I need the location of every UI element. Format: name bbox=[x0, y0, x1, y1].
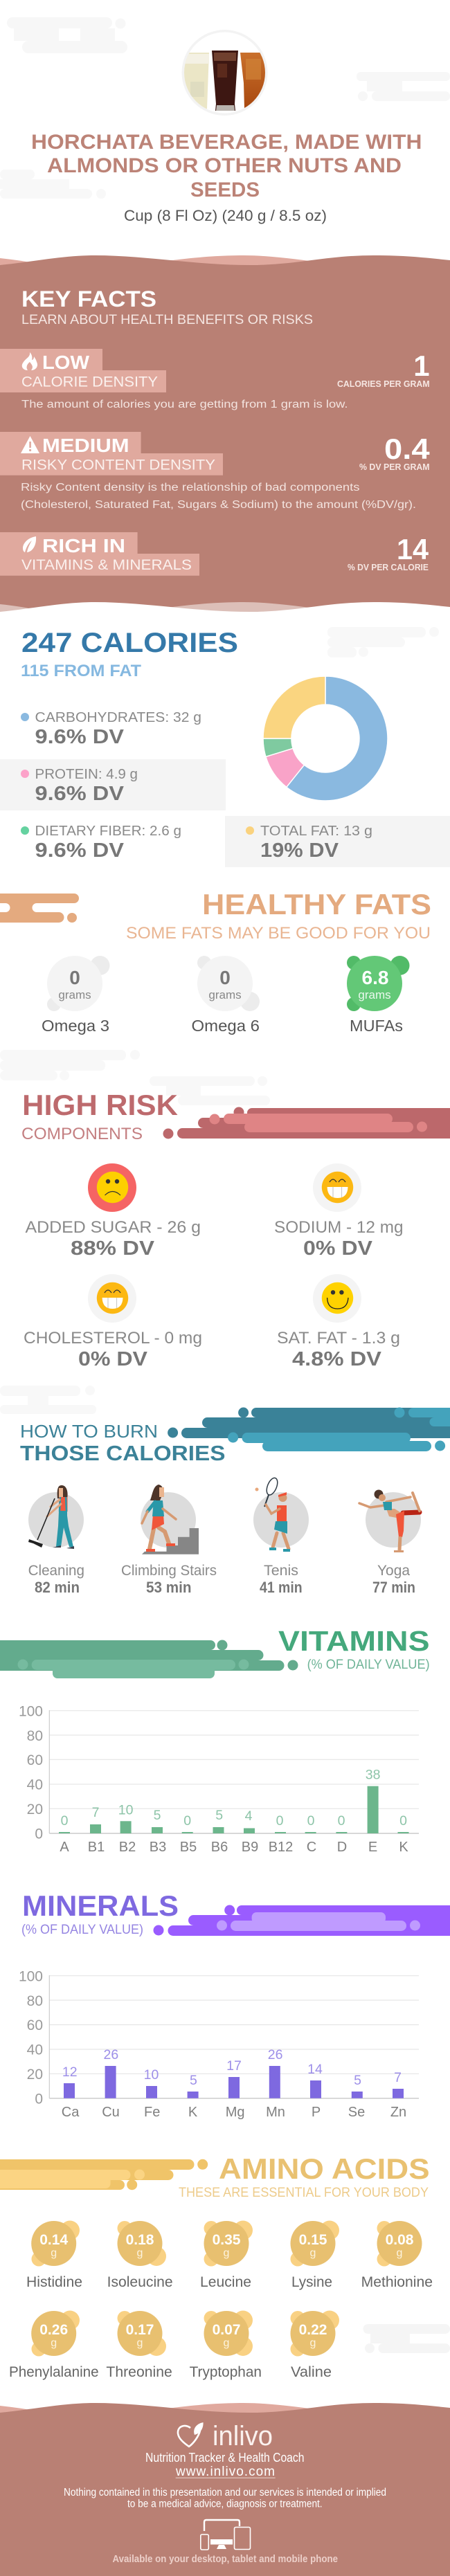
amino: methionine: Methionine bbox=[361, 2274, 433, 2290]
subheading: from fat: 115 FROM FAT bbox=[21, 662, 141, 680]
bar chart: minerals: Cu bbox=[102, 2105, 120, 2120]
decorative cloud: above high risk left bbox=[0, 1050, 140, 1080]
title: HORCHATA BEVERAGE, MADE WITH bbox=[31, 131, 422, 154]
calorie density block: LOW bbox=[42, 352, 90, 373]
subheading: THESE ARE ESSENTIAL FOR YOUR BODY bbox=[179, 2186, 429, 2200]
disclaimer: Nothing contained in this presentation and our services is intended or implied bbox=[64, 2487, 386, 2498]
activity: climbing stairs: Climbing Stairs bbox=[121, 1563, 217, 1579]
bar chart: minerals: 20 bbox=[27, 2067, 43, 2083]
title: SEEDS bbox=[190, 179, 260, 201]
bar chart: vitamins: 4 bbox=[245, 1808, 253, 1824]
activity: tennis: Tenis bbox=[264, 1563, 298, 1579]
bar chart: vitamins: B3 bbox=[150, 1840, 166, 1855]
vitamins and minerals richness block: VITAMINS & MINERALS bbox=[21, 556, 192, 573]
bar chart: vitamins: 5 bbox=[154, 1808, 161, 1823]
bar chart: vitamins: 0 bbox=[276, 1813, 284, 1829]
bar chart: minerals: 0 bbox=[35, 2092, 43, 2107]
bar chart: minerals bbox=[19, 1968, 419, 2120]
risky content density block: (Cholesterol, Saturated Fat, Sugars & Sodium) to the amount (%DV/gr). bbox=[21, 499, 416, 511]
heading: how to burn: HOW TO BURN bbox=[20, 1421, 158, 1442]
bar chart: minerals: Ca bbox=[62, 2105, 80, 2120]
amino: threonine: 0.17 bbox=[126, 2322, 154, 2338]
website link: www.inlivo.com bbox=[175, 2465, 275, 2479]
risky content density block: MEDIUM bbox=[42, 435, 129, 456]
icon: warning triangle bbox=[21, 436, 39, 453]
icon: devices bbox=[201, 2520, 251, 2550]
bar chart: vitamins: 60 bbox=[27, 1752, 43, 1768]
activity: cleaning bbox=[28, 1485, 84, 1596]
subheading: SOME FATS MAY BE GOOD FOR YOU bbox=[126, 924, 431, 943]
macro: total fat: 19% DV bbox=[260, 840, 339, 862]
bar chart: vitamins bbox=[19, 1703, 419, 1855]
amino: phenylalanine: Phenylalanine bbox=[9, 2364, 99, 2380]
amino: tryptophan bbox=[190, 2310, 262, 2380]
risky content density block: RISKY CONTENT DENSITY bbox=[21, 457, 215, 473]
bar chart: vitamins: 38 bbox=[366, 1768, 380, 1783]
bar chart: vitamins: B6 bbox=[211, 1840, 228, 1855]
panel: footer bbox=[0, 2403, 450, 2576]
bar chart: minerals: 26 bbox=[104, 2047, 118, 2062]
bar chart: minerals: 14 bbox=[307, 2062, 323, 2077]
heading: those calories: THOSE CALORIES bbox=[20, 1441, 226, 1465]
macro: total fat bbox=[225, 816, 450, 867]
amino: histidine bbox=[26, 2220, 82, 2290]
heading: healthy fats: HEALTHY FATS bbox=[202, 888, 431, 920]
heading: calories: 247 CALORIES bbox=[21, 628, 238, 658]
amino: valine: g bbox=[310, 2337, 316, 2349]
amino: leucine: Leucine bbox=[200, 2274, 251, 2290]
availability note: Available on your desktop, tablet and mobile phone bbox=[112, 2553, 338, 2565]
risk item: cholesterol bbox=[24, 1274, 202, 1370]
calorie density block: CALORIES PER GRAM bbox=[337, 379, 430, 389]
food photo: three glasses in a circle bbox=[180, 30, 270, 116]
amino: lysine: Lysine bbox=[291, 2274, 332, 2290]
bar chart: vitamins: 0 bbox=[399, 1813, 407, 1829]
badge: omega 6: 0 bbox=[219, 967, 231, 988]
vitamins and minerals richness block: % DV PER CALORIE bbox=[348, 563, 429, 572]
badge: omega 3: 0 bbox=[69, 967, 80, 988]
bar chart: vitamins: 0 bbox=[338, 1813, 345, 1829]
bar chart: vitamins: E bbox=[368, 1840, 377, 1855]
amino: phenylalanine: 0.26 bbox=[39, 2322, 68, 2338]
badge: omega 6: grams bbox=[208, 988, 242, 1001]
amino: leucine: 0.35 bbox=[213, 2232, 241, 2248]
amino: valine: Valine bbox=[291, 2364, 332, 2380]
amino: isoleucine: Isoleucine bbox=[107, 2274, 173, 2290]
amino: isoleucine: g bbox=[137, 2247, 143, 2259]
badge: MUFAs: grams bbox=[358, 988, 391, 1001]
calorie density block: The amount of calories you are getting from 1 gram is low. bbox=[21, 399, 348, 410]
panel: calories and macronutrients bbox=[0, 628, 450, 867]
amino: valine bbox=[291, 2310, 339, 2380]
bar chart: vitamins: D bbox=[337, 1840, 347, 1855]
bar chart: vitamins: 0 bbox=[35, 1826, 43, 1842]
badge: omega 3: grams bbox=[58, 988, 91, 1001]
bar chart: minerals: 5 bbox=[354, 2073, 361, 2088]
bar chart: vitamins: A bbox=[60, 1840, 69, 1855]
heading: key facts: KEY FACTS bbox=[21, 287, 156, 311]
activity: climbing stairs: 53 min bbox=[146, 1579, 191, 1596]
banner: minerals bbox=[154, 1905, 450, 1936]
bar chart: vitamins: B12 bbox=[269, 1840, 293, 1855]
bar chart: minerals: P bbox=[312, 2105, 321, 2120]
disclaimer bbox=[64, 2487, 386, 2510]
risky content density block bbox=[0, 432, 430, 511]
bar chart: minerals: 80 bbox=[27, 1993, 43, 2009]
badge: MUFAs bbox=[347, 956, 410, 1035]
icon: leaf bbox=[23, 536, 36, 552]
risk item: saturated fat bbox=[277, 1274, 400, 1370]
calorie density block bbox=[0, 349, 430, 410]
macro: carbohydrates bbox=[21, 710, 201, 748]
panel: how to burn those calories bbox=[20, 1408, 450, 1596]
amino: threonine: g bbox=[137, 2337, 143, 2349]
bar chart: vitamins: C bbox=[307, 1840, 316, 1855]
risk item: cholesterol: CHOLESTEROL - 0 mg bbox=[24, 1329, 202, 1348]
risk item: cholesterol: 0% DV bbox=[78, 1348, 148, 1370]
macro: dietary fiber: DIETARY FIBER: 2.6 g bbox=[35, 824, 181, 839]
macro: protein: PROTEIN: 4.9 g bbox=[35, 767, 138, 782]
heading: high risk: HIGH RISK bbox=[22, 1089, 178, 1121]
amino: isoleucine: 0.18 bbox=[126, 2232, 154, 2248]
risk item: sodium: 0% DV bbox=[303, 1237, 373, 1260]
bar chart: vitamins: 80 bbox=[27, 1728, 43, 1744]
macro: total fat: TOTAL FAT: 13 g bbox=[260, 824, 372, 839]
badge: omega 3 bbox=[42, 956, 109, 1035]
calorie density block: 1 bbox=[413, 350, 430, 382]
bar chart: minerals: 40 bbox=[27, 2042, 43, 2058]
macro: protein: 9.6% DV bbox=[35, 783, 125, 805]
amino: isoleucine bbox=[107, 2221, 173, 2290]
heading: vitamins: VITAMINS bbox=[278, 1625, 430, 1657]
amino: methionine: 0.08 bbox=[386, 2232, 414, 2248]
badge: MUFAs: 6.8 bbox=[362, 967, 388, 988]
bar chart: vitamins: 5 bbox=[215, 1808, 223, 1823]
bar chart: minerals: 17 bbox=[226, 2058, 242, 2074]
risky content density block: % DV PER GRAM bbox=[359, 462, 430, 472]
macro: carbohydrates: CARBOHYDRATES: 32 g bbox=[35, 710, 201, 725]
title: ALMONDS OR OTHER NUTS AND bbox=[47, 154, 402, 177]
subheading: LEARN ABOUT HEALTH BENEFITS OR RISKS bbox=[21, 313, 313, 327]
macro: dietary fiber bbox=[21, 824, 181, 862]
bar chart: minerals: 60 bbox=[27, 2017, 43, 2033]
bar chart: vitamins: 10 bbox=[118, 1803, 134, 1818]
logo: inlivo bbox=[178, 2421, 273, 2451]
bar chart: minerals: K bbox=[188, 2105, 198, 2120]
bar chart: minerals: Fe bbox=[144, 2105, 160, 2120]
badge: omega 6 bbox=[191, 956, 260, 1035]
decorative cloud: above burn section bbox=[0, 1386, 96, 1414]
panel: amino acids bbox=[0, 2152, 433, 2380]
bar chart: vitamins: 100 bbox=[19, 1703, 43, 1719]
amino: methionine: g bbox=[397, 2247, 402, 2259]
icon: flame bbox=[22, 352, 37, 370]
amino: leucine: g bbox=[224, 2247, 229, 2259]
banner: healthy fats bbox=[0, 894, 79, 923]
amino: lysine: 0.15 bbox=[299, 2232, 327, 2248]
bar chart: minerals: Zn bbox=[390, 2105, 406, 2120]
decorative cloud: calories bbox=[327, 627, 439, 657]
subheading: percent of daily value: (% OF DAILY VALUE) bbox=[307, 1658, 430, 1672]
amino: threonine: Threonine bbox=[106, 2364, 172, 2380]
risky content density block: 0.4 bbox=[384, 433, 430, 465]
panel: minerals bbox=[19, 1889, 450, 2120]
amino: histidine: g bbox=[51, 2247, 57, 2259]
bar chart: minerals: 5 bbox=[190, 2073, 197, 2088]
bar chart: minerals: 10 bbox=[144, 2067, 159, 2083]
amino: phenylalanine: g bbox=[51, 2337, 57, 2349]
risk item: added sugar: ADDED SUGAR - 26 g bbox=[25, 1218, 201, 1237]
amino: phenylalanine bbox=[9, 2310, 99, 2380]
banner: amino acids bbox=[0, 2159, 208, 2190]
tagline: Nutrition Tracker & Health Coach bbox=[145, 2451, 305, 2465]
bar chart: vitamins: 20 bbox=[27, 1802, 43, 1817]
title bbox=[31, 131, 422, 201]
subheading: components: COMPONENTS bbox=[21, 1125, 143, 1143]
bar chart: vitamins: 0 bbox=[61, 1813, 69, 1829]
risk item: saturated fat: 4.8% DV bbox=[292, 1348, 382, 1370]
logo: inlivo: inlivo bbox=[213, 2421, 273, 2451]
bar chart: vitamins: B1 bbox=[88, 1840, 105, 1855]
serving size: Cup (8 Fl Oz) (240 g / 8.5 oz) bbox=[124, 207, 327, 224]
activity: climbing stairs bbox=[121, 1485, 217, 1596]
bar chart: minerals: 26 bbox=[268, 2047, 282, 2062]
macro: carbohydrates: 9.6% DV bbox=[35, 726, 125, 748]
banner: high risk bbox=[163, 1107, 450, 1139]
heading: amino acids: AMINO ACIDS bbox=[219, 2152, 430, 2185]
donut chart bbox=[263, 676, 388, 801]
bar chart: vitamins: 0 bbox=[183, 1813, 191, 1829]
risk item: sodium bbox=[274, 1163, 403, 1260]
amino: valine: 0.22 bbox=[299, 2322, 327, 2338]
bar chart: minerals: Mn bbox=[266, 2105, 285, 2120]
amino: tryptophan: 0.07 bbox=[213, 2322, 240, 2338]
bar chart: vitamins: B2 bbox=[119, 1840, 136, 1855]
bar chart: vitamins: 0 bbox=[307, 1813, 315, 1829]
risky content density block: Risky Content density is the relationship of bad components bbox=[21, 482, 360, 493]
macro: protein bbox=[0, 759, 226, 810]
amino: methionine bbox=[361, 2221, 433, 2290]
badge: MUFAs: MUFAs bbox=[350, 1017, 403, 1035]
activity: yoga: 77 min bbox=[372, 1579, 415, 1596]
badge: omega 6: Omega 6 bbox=[191, 1017, 260, 1035]
decorative cloud: top left bbox=[7, 17, 127, 53]
activity: tennis: 41 min bbox=[260, 1579, 303, 1596]
bar chart: minerals: 100 bbox=[19, 1968, 43, 1984]
amino: threonine bbox=[106, 2311, 172, 2380]
bar chart: minerals: Se bbox=[348, 2105, 365, 2120]
bar chart: vitamins: K bbox=[399, 1840, 408, 1855]
vitamins and minerals richness block: 14 bbox=[397, 533, 429, 565]
decorative cloud: top right bbox=[357, 72, 450, 101]
bar chart: vitamins: B9 bbox=[242, 1840, 258, 1855]
risk item: added sugar: 88% DV bbox=[71, 1237, 155, 1260]
activity: tennis bbox=[253, 1476, 309, 1596]
activity: yoga bbox=[359, 1489, 421, 1596]
amino: histidine: Histidine bbox=[26, 2274, 82, 2290]
macro: dietary fiber: 9.6% DV bbox=[35, 840, 125, 862]
amino: lysine bbox=[291, 2220, 339, 2290]
panel: vitamins bbox=[0, 1625, 430, 1855]
activity: cleaning: 82 min bbox=[35, 1579, 80, 1596]
bar chart: minerals: Mg bbox=[226, 2105, 244, 2120]
amino: tryptophan: Tryptophan bbox=[190, 2364, 262, 2380]
bar chart: vitamins: 40 bbox=[27, 1777, 43, 1793]
calorie density block: CALORIE DENSITY bbox=[21, 374, 158, 390]
panel: high risk components bbox=[21, 1089, 450, 1370]
risk item: added sugar bbox=[25, 1163, 201, 1260]
decorative cloud: left of title bbox=[0, 170, 106, 199]
activity: cleaning: Cleaning bbox=[28, 1563, 84, 1579]
amino: lysine: g bbox=[310, 2247, 316, 2259]
panel: key facts bbox=[0, 255, 450, 623]
banner: burn bbox=[168, 1408, 450, 1451]
banner: vitamins bbox=[0, 1640, 298, 1678]
risk item: saturated fat: SAT. FAT - 1.3 g bbox=[277, 1329, 400, 1348]
badge: omega 3: Omega 3 bbox=[42, 1017, 109, 1035]
decorative cloud: bottom right bbox=[363, 2324, 450, 2353]
heading: minerals: MINERALS bbox=[22, 1889, 179, 1922]
vitamins and minerals richness block: RICH IN bbox=[42, 535, 125, 556]
bar chart: vitamins: 7 bbox=[92, 1805, 99, 1820]
disclaimer: to be a medical advice, diagnosis or treatment. bbox=[127, 2498, 323, 2510]
activity: yoga: Yoga bbox=[377, 1563, 410, 1579]
subheading: percent of daily value: (% OF DAILY VALUE) bbox=[21, 1923, 143, 1937]
amino: histidine: 0.14 bbox=[39, 2232, 68, 2248]
panel: healthy fats bbox=[0, 888, 431, 1035]
amino: tryptophan: g bbox=[224, 2337, 229, 2349]
vitamins and minerals richness block bbox=[0, 532, 429, 576]
bar chart: minerals: 7 bbox=[394, 2070, 402, 2085]
bar chart: vitamins: B5 bbox=[180, 1840, 197, 1855]
decorative cloud: above high risk centre bbox=[150, 1076, 270, 1105]
bar chart: minerals: 12 bbox=[62, 2065, 78, 2080]
risk item: sodium: SODIUM - 12 mg bbox=[274, 1218, 403, 1237]
amino: leucine bbox=[200, 2220, 253, 2290]
